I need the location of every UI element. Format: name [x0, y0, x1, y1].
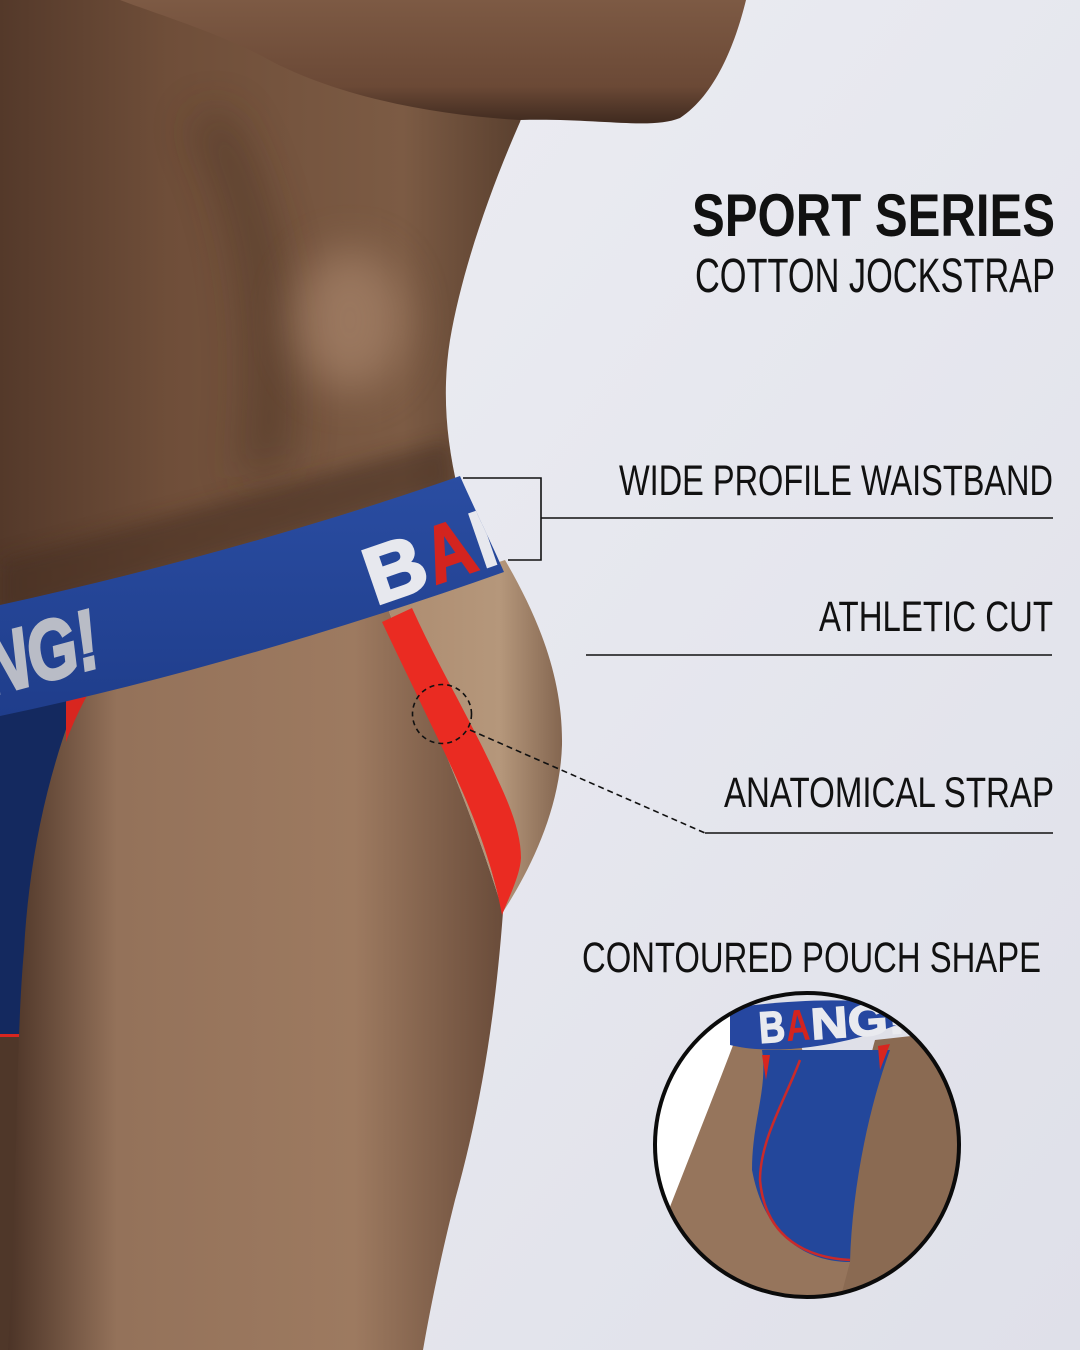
inset leg left: [670, 1046, 850, 1295]
torso shading: [0, 110, 455, 620]
model photo illustration: [0, 0, 746, 1350]
inset waistband: [730, 1000, 896, 1050]
inset logo: NG!: [809, 994, 906, 1049]
inset piping: [760, 1060, 850, 1260]
logo right: [361, 510, 498, 606]
torso highlight: [295, 250, 405, 390]
inset white backdrop: [657, 1016, 733, 1206]
waistband: [0, 476, 504, 716]
red strap: [382, 608, 521, 915]
pouch hem: [0, 1034, 24, 1037]
red pouch edge: [66, 690, 90, 742]
glute: [385, 560, 562, 912]
pouch: [0, 680, 110, 1036]
torso: [0, 0, 560, 640]
abdominal shading: [190, 110, 292, 480]
rear leg: [0, 1030, 30, 1350]
inset logo: B: [757, 1002, 787, 1053]
inset pouch: [752, 1050, 890, 1262]
hip crease shadow: [0, 440, 455, 620]
logo right: A: [412, 501, 486, 601]
inset red edges: [762, 1044, 890, 1080]
waistband logos: [0, 484, 534, 713]
inset logo: [760, 1005, 902, 1044]
callout: anatomical strap: [412, 684, 1054, 833]
inset logo: A: [784, 1001, 812, 1051]
inset leg right: [842, 1036, 957, 1290]
callout: waistband: [463, 457, 1053, 560]
thigh: [8, 600, 503, 1350]
logo right: B: [352, 518, 438, 621]
logo right: N: [460, 484, 534, 584]
inset: pouch detail: [650, 990, 970, 1300]
forearm: [120, 0, 746, 123]
